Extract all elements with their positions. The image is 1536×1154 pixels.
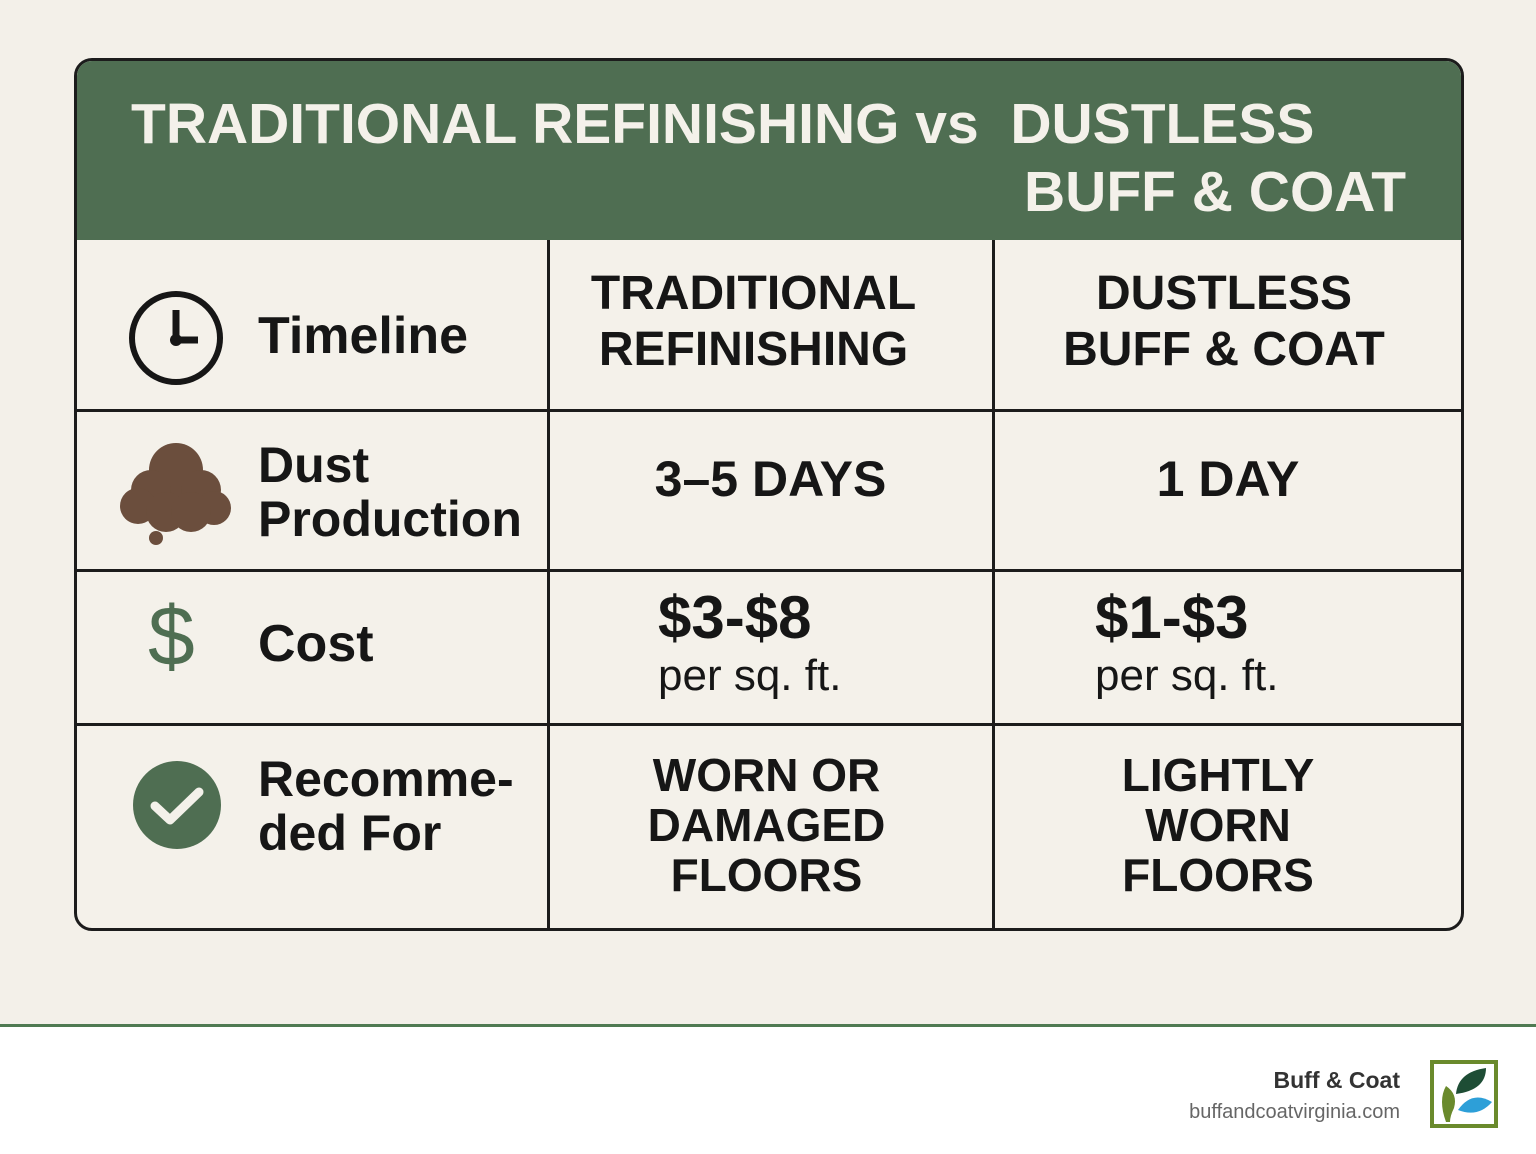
label: cost: Cost [258, 615, 374, 673]
value: traditional floors [648, 749, 885, 901]
value: traditional cost: $3-$8 [658, 584, 811, 651]
label: dust production [258, 437, 522, 547]
value: dustless floors: LIGHTLY [1122, 749, 1314, 801]
header: dustless: BUFF & COAT [1063, 323, 1385, 376]
value: traditional cost: per sq. ft. [658, 651, 841, 700]
header: dustless: DUSTLESS [1096, 267, 1352, 320]
header: dustless [1063, 267, 1385, 376]
icon: logo [1430, 1060, 1498, 1128]
value: traditional cost [658, 584, 841, 700]
value: dustless floors [1122, 749, 1314, 901]
row: dust [120, 437, 1299, 547]
value: traditional floors: WORN OR [653, 749, 880, 801]
value: dustless floors: WORN [1145, 799, 1291, 851]
grid lines [547, 240, 550, 940]
icon: check [133, 761, 221, 849]
value: dustless cost [1095, 584, 1278, 700]
label: recommended for: Recomme- [258, 751, 514, 807]
brand name: Buff & Coat [1274, 1067, 1400, 1093]
icon: dust cloud [120, 443, 231, 545]
value: traditional days: 3–5 DAYS [655, 451, 886, 507]
icon: clock [129, 291, 223, 385]
label: dust production: Production [258, 491, 522, 547]
title header [74, 58, 1464, 240]
header: traditional [591, 267, 916, 376]
value: dustless cost: per sq. ft. [1095, 651, 1278, 700]
comparison card [74, 58, 1464, 931]
title: TRADITIONAL REFINISHING vs DUSTLESS [131, 92, 1314, 156]
header: traditional: REFINISHING [599, 323, 908, 376]
value: dustless days: 1 DAY [1157, 451, 1299, 507]
label: dust production: Dust [258, 437, 369, 493]
value: dustless cost: $1-$3 [1095, 584, 1248, 651]
label: timeline: Timeline [258, 307, 468, 365]
icon: dollar: $ [148, 589, 195, 683]
value: dustless floors: FLOORS [1122, 849, 1314, 901]
footer [0, 1024, 1536, 1154]
value: traditional floors: FLOORS [671, 849, 862, 901]
header: traditional: TRADITIONAL [591, 267, 916, 320]
brand url: buffandcoatvirginia.com [1189, 1101, 1400, 1123]
value: traditional floors: DAMAGED [648, 799, 885, 851]
label: recommended for [258, 751, 514, 861]
label: recommended for: ded For [258, 805, 441, 861]
title [131, 92, 1406, 224]
row: timeline [129, 267, 1385, 385]
title: BUFF & COAT [1024, 160, 1406, 224]
row: recommended [133, 749, 1314, 901]
row: cost [148, 584, 1278, 700]
